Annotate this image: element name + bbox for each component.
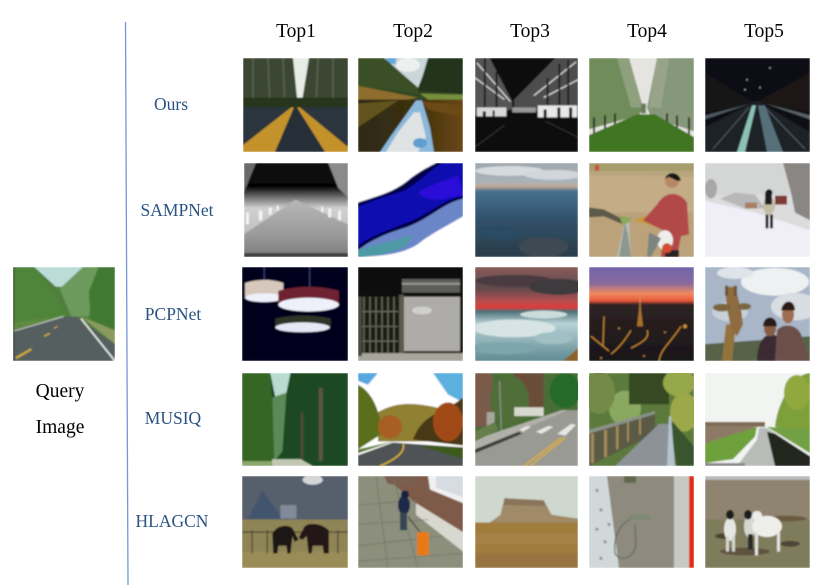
query image caption: Image [36, 417, 84, 438]
query image caption: Query [36, 381, 85, 402]
MUSIQ top1: tall pine forest [242, 373, 348, 466]
query image: mountain road [13, 267, 115, 361]
SAMPNet top5: person walking in snow [705, 163, 810, 257]
column heading: Top2: Top2 [393, 21, 433, 42]
MUSIQ top3: road with crosswalk [475, 373, 578, 466]
method label: HLAGCN: HLAGCN [136, 511, 209, 531]
SAMPNet top3: aerial landscape [475, 163, 578, 257]
Ours top2: lake with cloud reflection [358, 58, 463, 152]
column heading: Top1: Top1 [276, 21, 316, 42]
PCPNet top3: stormy sea at sunset [475, 267, 578, 361]
method label: PCPNet: PCPNet [145, 304, 201, 324]
PCPNet top1: pendant lamps [242, 267, 348, 361]
Ours top1: forest road with yellow lines [243, 58, 348, 152]
SAMPNet top1: grey tunnel [244, 163, 348, 257]
column heading: Top5: Top5 [744, 21, 784, 42]
Ours top5: night street with reflections [705, 58, 810, 152]
PCPNet top4: Paris at dusk [589, 267, 694, 361]
Ours top4: blossoming orchard [589, 58, 694, 152]
MUSIQ top5: canal through fields [705, 373, 810, 466]
column heading: Top3: Top3 [510, 21, 550, 42]
HLAGCN top1: two horses in a field [242, 476, 348, 568]
method label: MUSIQ: MUSIQ [145, 408, 202, 428]
SAMPNet top4: man with kite on beach [589, 163, 694, 257]
method label: Ours: Ours [154, 94, 188, 114]
HLAGCN top4: shower with curtain [589, 476, 694, 568]
vertical divider line [126, 22, 128, 585]
Ours top3: black and white street [475, 58, 578, 152]
PCPNet top2: old metal gate [358, 267, 463, 361]
method label: SAMPNet: SAMPNet [141, 200, 214, 220]
query image caption [36, 381, 85, 438]
HLAGCN top3: mesa and prairie [475, 476, 578, 568]
column heading: Top4: Top4 [627, 21, 667, 42]
PCPNet top5: couple with giraffe [705, 267, 810, 361]
HLAGCN top2: child with orange suitcase [358, 476, 463, 568]
MUSIQ top2: autumn road [358, 373, 463, 466]
MUSIQ top4: wooden bridge over water [589, 373, 694, 466]
SAMPNet top2: blue ribbon render [358, 163, 463, 257]
HLAGCN top5: three lambs on a field [705, 476, 810, 568]
